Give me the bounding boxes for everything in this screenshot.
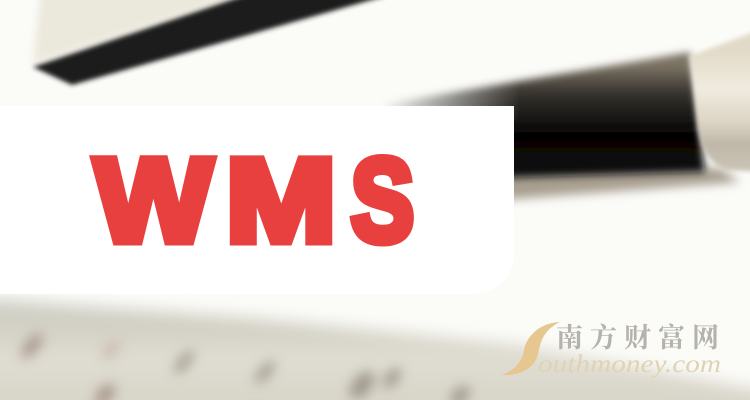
title: WMS: S	[351, 134, 414, 266]
upper pen: cream body	[33, 0, 290, 64]
title panel	[0, 106, 514, 294]
title: WMS: W	[95, 134, 213, 266]
title: WMS: M	[226, 135, 336, 266]
title: WMS	[95, 134, 414, 266]
logo Chinese name: 南方财富网	[556, 316, 719, 355]
lower pen: barrel fade toward the paper	[340, 60, 520, 120]
lower pen: cream cap	[690, 26, 750, 172]
bottom paper area	[0, 298, 750, 400]
lower pen: shadow under barrel	[500, 168, 740, 200]
watermark logo: Southmoney	[502, 316, 721, 378]
blurred marks on paper	[18, 331, 473, 400]
logo swoosh	[502, 322, 560, 375]
lower pen: black barrel	[360, 52, 705, 178]
upper pen: black barrel	[33, 0, 385, 85]
logo domain: outhmoney.com	[538, 351, 721, 378]
